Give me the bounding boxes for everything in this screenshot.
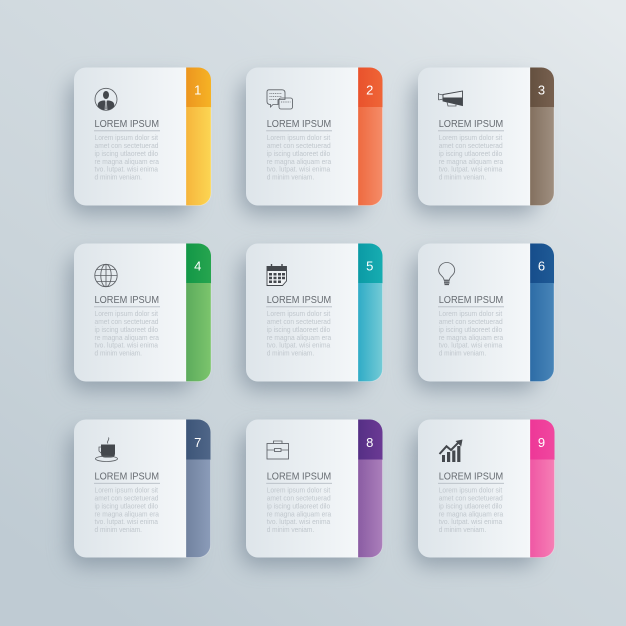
tab: number 6: 6 — [538, 258, 545, 274]
body text — [267, 309, 332, 358]
heading: LOREM IPSUM — [439, 472, 503, 482]
panel: card 8 — [241, 420, 382, 566]
tab: number 1 — [186, 68, 211, 107]
body text: tvo. lutpat. wisi enima — [439, 165, 503, 174]
tab: number 1: 1 — [194, 82, 201, 98]
tab: number 5 — [358, 244, 382, 283]
icon: megaphone — [438, 91, 462, 106]
panel: card 6 — [413, 244, 554, 390]
body text — [94, 309, 160, 358]
body text: d minim veniam. — [267, 525, 314, 534]
body text: re magna aliquam era — [94, 157, 160, 166]
body text: d minim veniam. — [94, 348, 142, 358]
body text: amet con sectetuerad — [439, 141, 503, 150]
tab: number 9: 9 — [538, 435, 545, 450]
icon: growth chart — [440, 440, 462, 462]
heading: LOREM IPSUM — [439, 119, 503, 130]
icon: chat bubbles — [267, 90, 292, 109]
body text: Lorem ipsum dolor sit — [439, 133, 502, 142]
body text: amet con sectetuerad — [439, 494, 503, 502]
icon: coffee cup — [96, 438, 118, 462]
icon: calendar — [267, 264, 286, 286]
body text: d minim veniam. — [94, 525, 142, 534]
tab: number 6 — [530, 244, 554, 283]
body text: re magna aliquam era — [439, 333, 504, 342]
tab: number 3 — [530, 68, 554, 107]
panel: card 3 — [413, 68, 554, 214]
body text — [439, 309, 504, 358]
panel: card 2 — [241, 68, 382, 214]
heading: LOREM IPSUM — [94, 119, 159, 130]
heading: LOREM IPSUM — [267, 472, 331, 482]
tab: number 8: 8 — [366, 435, 373, 450]
body text: Lorem ipsum dolor sit — [94, 309, 158, 318]
icon: briefcase — [267, 441, 288, 459]
body text: tvo. lutpat. wisi enima — [439, 517, 503, 526]
body text: amet con sectetuerad — [267, 494, 331, 502]
body text: Lorem ipsum dolor sit — [267, 486, 330, 494]
body text: d minim veniam. — [439, 172, 486, 182]
body text: tvo. lutpat. wisi enima — [267, 165, 331, 174]
tab: number 4 — [186, 244, 211, 283]
panel: card 7 — [69, 420, 210, 566]
icon: light bulb — [439, 262, 455, 284]
tab: number 8 — [358, 420, 382, 460]
body text — [267, 486, 332, 534]
body text: d minim veniam. — [267, 348, 314, 358]
body text: amet con sectetuerad — [267, 317, 331, 326]
body text: tvo. lutpat. wisi enima — [267, 517, 331, 526]
body text: ip iscing utlaoreet dilo — [267, 501, 330, 510]
body text: amet con sectetuerad — [94, 494, 158, 502]
body text: ip iscing utlaoreet dilo — [439, 325, 502, 334]
body text: Lorem ipsum dolor sit — [94, 486, 158, 494]
body text — [267, 133, 332, 182]
body text: tvo. lutpat. wisi enima — [267, 341, 331, 350]
tab: number 3: 3 — [538, 82, 545, 98]
body text: re magna aliquam era — [267, 509, 332, 518]
body text — [94, 486, 160, 534]
heading: LOREM IPSUM — [267, 119, 331, 130]
body text: ip iscing utlaoreet dilo — [94, 325, 158, 334]
body text: amet con sectetuerad — [94, 317, 158, 326]
panel: card 4 — [69, 244, 211, 390]
body text: d minim veniam. — [267, 172, 314, 182]
icon: globe — [95, 264, 117, 287]
body text: amet con sectetuerad — [267, 141, 331, 150]
panel: card 9 — [413, 420, 554, 566]
body text: ip iscing utlaoreet dilo — [439, 501, 502, 510]
body text: re magna aliquam era — [94, 333, 160, 342]
body text: ip iscing utlaoreet dilo — [94, 149, 158, 158]
body text: re magna aliquam era — [439, 157, 504, 166]
heading: LOREM IPSUM — [94, 295, 159, 306]
body text: ip iscing utlaoreet dilo — [267, 325, 330, 334]
body text: ip iscing utlaoreet dilo — [267, 149, 330, 158]
tab: number 2 — [358, 68, 382, 107]
body text: Lorem ipsum dolor sit — [439, 309, 502, 318]
body text — [439, 133, 504, 182]
body text: ip iscing utlaoreet dilo — [94, 501, 158, 510]
body text: d minim veniam. — [439, 525, 486, 534]
tab: number 7 — [186, 420, 210, 460]
body text: Lorem ipsum dolor sit — [94, 133, 158, 142]
heading: LOREM IPSUM — [439, 295, 503, 306]
panel: card 1 — [69, 68, 211, 214]
body text: re magna aliquam era — [267, 333, 332, 342]
body text: re magna aliquam era — [267, 157, 332, 166]
body text — [94, 133, 160, 182]
tab: number 4: 4 — [194, 258, 201, 274]
heading: LOREM IPSUM — [94, 472, 159, 482]
body text: Lorem ipsum dolor sit — [267, 133, 330, 142]
body text — [439, 486, 504, 534]
body text: Lorem ipsum dolor sit — [439, 486, 502, 494]
tab: number 5: 5 — [366, 258, 373, 274]
body text: d minim veniam. — [94, 172, 142, 182]
body text: d minim veniam. — [439, 348, 486, 358]
body text: tvo. lutpat. wisi enima — [94, 341, 159, 350]
body text: re magna aliquam era — [439, 509, 504, 518]
body text: tvo. lutpat. wisi enima — [439, 341, 503, 350]
body text: amet con sectetuerad — [94, 141, 158, 150]
heading: LOREM IPSUM — [267, 295, 331, 306]
body text: ip iscing utlaoreet dilo — [439, 149, 502, 158]
body text: tvo. lutpat. wisi enima — [94, 165, 159, 174]
body text: re magna aliquam era — [94, 509, 160, 518]
body text: amet con sectetuerad — [439, 317, 503, 326]
body text: Lorem ipsum dolor sit — [267, 309, 330, 318]
panel: card 5 — [241, 244, 382, 390]
tab: number 9 — [530, 420, 554, 460]
tab: number 7: 7 — [194, 435, 201, 450]
icon: businessman — [95, 88, 117, 110]
tab: number 2: 2 — [366, 82, 373, 98]
body text: tvo. lutpat. wisi enima — [94, 517, 159, 526]
